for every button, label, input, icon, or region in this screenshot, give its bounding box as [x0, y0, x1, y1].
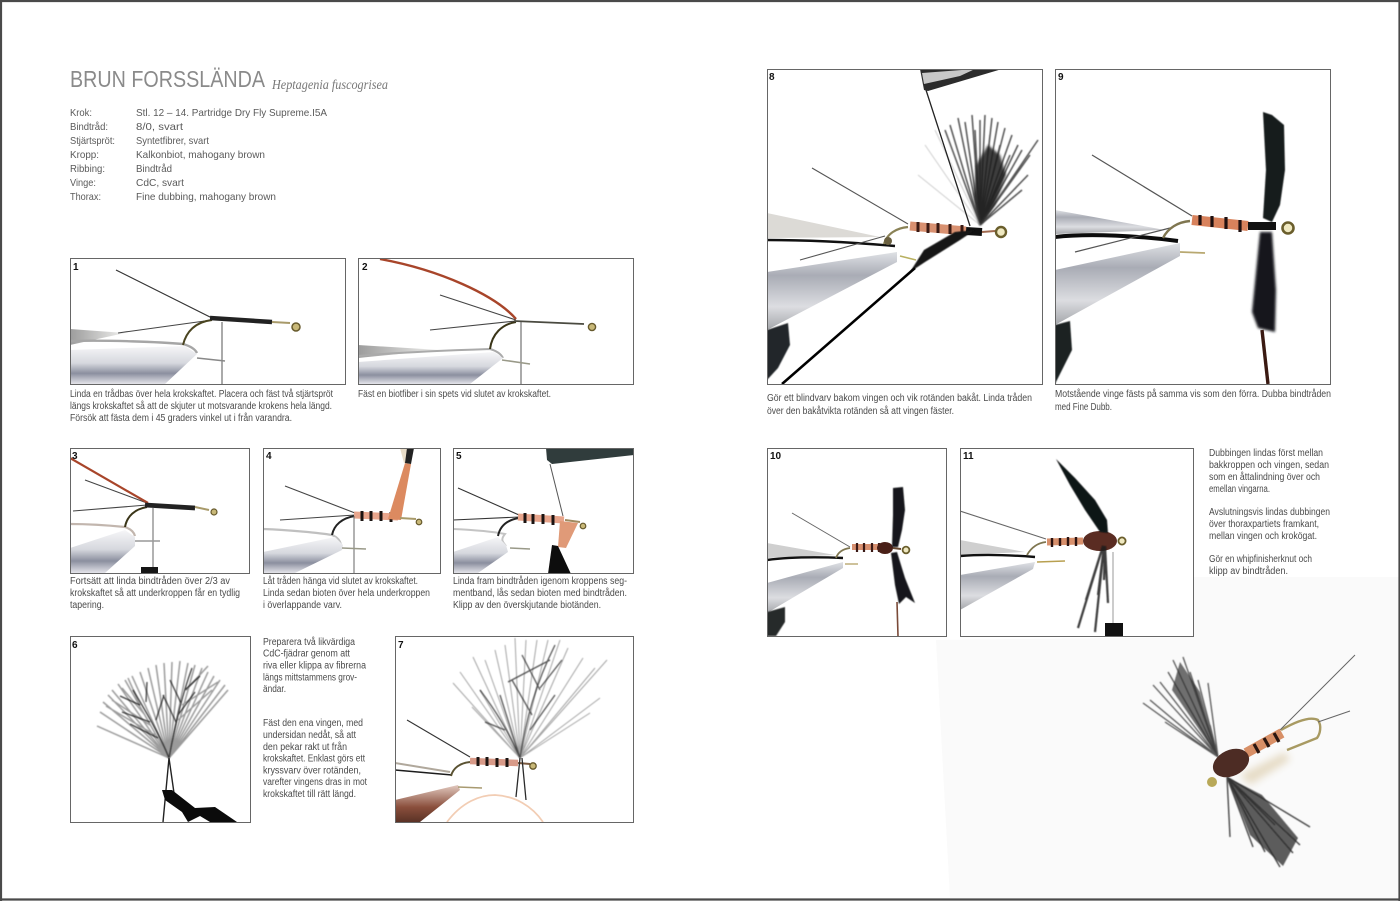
- step number: 2: [362, 262, 368, 273]
- frame: [768, 448, 946, 636]
- text: final steps: över thoraxpartiets framkant,: [1209, 519, 1319, 530]
- abdomen: [1246, 733, 1282, 753]
- caption: Försök att fästa dem i 45 graders vinkel ut i från varandra.: [70, 412, 292, 424]
- frame: [396, 636, 634, 822]
- step number: 7: [398, 640, 404, 651]
- caption: Linda fram bindtråden igenom kroppens seg-: [453, 575, 627, 587]
- frame: [70, 258, 346, 384]
- panel: step 2: [358, 258, 634, 400]
- caption: [453, 575, 627, 611]
- text: step 6 side notes: krokskaftet till rätt längd.: [263, 789, 356, 800]
- caption: [70, 575, 240, 611]
- step number: 1: [73, 262, 79, 273]
- caption: Låt tråden hänga vid slutet av krokskaftet.: [263, 575, 418, 587]
- caption: med Fine Dubb.: [1055, 402, 1112, 413]
- frame: [358, 258, 634, 384]
- frame: [1056, 70, 1330, 384]
- text: step 6 side notes: riva eller klippa av fibrerna: [263, 660, 366, 672]
- caption: [1055, 388, 1331, 413]
- step number: 4: [266, 451, 272, 462]
- antennae: [1280, 655, 1355, 730]
- materials list: Stl. 12 – 14. Partridge Dry Fly Supreme.I5A: [136, 107, 327, 119]
- panel: step 4: [263, 448, 440, 611]
- caption: längs krokskaftet så att de skjuter ut motsvarande krokens hela längd.: [70, 400, 332, 412]
- step number: 8: [769, 72, 775, 83]
- text: final steps: som en åttalindning över och: [1209, 471, 1320, 483]
- upper wing: [1143, 657, 1218, 757]
- panel: step 11: [960, 448, 1194, 636]
- caption: Motstående vinge fästs på samma vis som den förra. Dubba bindtråden: [1055, 388, 1331, 400]
- title: fly name: BRUN FORSSLÄNDA: [70, 66, 265, 92]
- text: final steps: mellan vingen och krokögat.: [1209, 531, 1317, 542]
- materials list: Bindtråd: [136, 163, 172, 175]
- panel: step 10: [767, 448, 946, 636]
- text: step 6 side notes: CdC-fjädrar genom att: [263, 648, 350, 660]
- caption: Linda sedan bioten över hela underkroppen: [263, 588, 430, 599]
- panel: step 3: [70, 448, 250, 611]
- frame: [70, 636, 250, 822]
- materials list: Ribbing:: [70, 163, 105, 175]
- frame: [264, 448, 440, 574]
- caption: [767, 392, 1032, 417]
- text: final steps: klipp av bindtråden.: [1209, 565, 1288, 577]
- text: step 6 side notes: Fäst den ena vingen, med: [263, 718, 363, 729]
- text: final steps: bakkroppen och vingen, sedan: [1209, 460, 1329, 471]
- shadow: [1240, 752, 1290, 785]
- step number: 9: [1058, 72, 1064, 83]
- materials list: Krok:: [70, 107, 92, 119]
- frame: [454, 448, 634, 574]
- text: step 6 side notes: längs mittstammens grov-: [263, 672, 357, 684]
- step number: 10: [770, 451, 782, 462]
- materials list: Syntetfibrer, svart: [136, 135, 209, 147]
- step number: 6: [72, 640, 78, 651]
- materials list: [70, 107, 327, 203]
- text: step 6 side notes: den pekar rakt ut från: [263, 741, 347, 753]
- materials list: Fine dubbing, mahogany brown: [136, 191, 276, 203]
- caption: [263, 575, 430, 611]
- panel: step 6: [70, 636, 250, 822]
- soft photo backdrop: [936, 577, 1400, 898]
- title: [70, 66, 388, 92]
- abdomen bands: [1254, 733, 1279, 753]
- photo: finished fly: [1143, 655, 1355, 867]
- step number: 3: [72, 451, 78, 462]
- materials list: 8/0, svart: [136, 121, 183, 133]
- text: final steps: Dubbingen lindas först mellan: [1209, 448, 1323, 459]
- thorax: [1208, 743, 1254, 783]
- caption: Gör ett blindvarv bakom vingen och vik rotänden bakåt. Linda tråden: [767, 392, 1032, 404]
- caption: krokskaftet så att underkroppen får en tydlig: [70, 587, 240, 599]
- text: step 6 side notes: Preparera två likvärdiga: [263, 636, 355, 648]
- caption: tapering.: [70, 600, 104, 611]
- text: step 6 side notes: undersidan nedåt, så att: [263, 729, 356, 741]
- hook: [1281, 719, 1320, 750]
- materials list: Vinge:: [70, 177, 96, 189]
- panel: step 5: [453, 448, 634, 611]
- materials list: Stjärtspröt:: [70, 135, 115, 147]
- text: final steps: Gör en whipfinisherknut och: [1209, 554, 1312, 565]
- panel: step 9: [1055, 70, 1331, 413]
- materials list: Kropp:: [70, 149, 99, 161]
- caption: över den bakåtvikta rotänden så att vingen fäster.: [767, 405, 954, 417]
- caption: Fortsätt att linda bindtråden över 2/3 av: [70, 575, 230, 587]
- caption: Linda en trådbas över hela krokskaftet. Placera och fäst två stjärtspröt: [70, 388, 333, 400]
- caption: [70, 388, 333, 424]
- step number: 11: [963, 451, 974, 462]
- step number: 5: [456, 451, 462, 462]
- panel: step 8: [767, 69, 1042, 417]
- text: step 6 side notes: kryssvarv över rotänden,: [263, 766, 361, 776]
- title: latin name: Heptagenia fuscogrisea: [271, 77, 388, 92]
- caption: mentband, lås sedan bioten med bindtråden.: [453, 587, 627, 599]
- materials list: Bindtråd:: [70, 121, 108, 133]
- frame: [768, 70, 1042, 384]
- materials list: CdC, svart: [136, 177, 184, 189]
- text: step 6 side notes: ändar.: [263, 684, 286, 695]
- text: step 6 side notes: [263, 636, 367, 800]
- caption: i överlappande varv.: [263, 600, 342, 611]
- materials list: Thorax:: [70, 191, 101, 203]
- caption: Klipp av den överskjutande biotänden.: [453, 600, 601, 611]
- materials list: Kalkonbiot, mahogany brown: [136, 149, 265, 161]
- eye: [1207, 777, 1217, 787]
- panel: step 7: [395, 636, 634, 822]
- text: step 6 side notes: varefter vingens dras in mot: [263, 777, 367, 788]
- text: step 6 side notes: krokskaftet. Enklast görs ett: [263, 754, 365, 764]
- lower wing: [1227, 777, 1310, 867]
- panel: step 1: [70, 258, 346, 424]
- text: final steps: [1209, 448, 1330, 577]
- frame: [960, 448, 1194, 636]
- text: final steps: Avslutningsvis lindas dubbingen: [1209, 507, 1330, 518]
- frame: [70, 448, 250, 574]
- text: final steps: emellan vingarna.: [1209, 484, 1270, 495]
- caption: Fäst en biotfiber i sin spets vid slutet av krokskaftet.: [358, 389, 551, 400]
